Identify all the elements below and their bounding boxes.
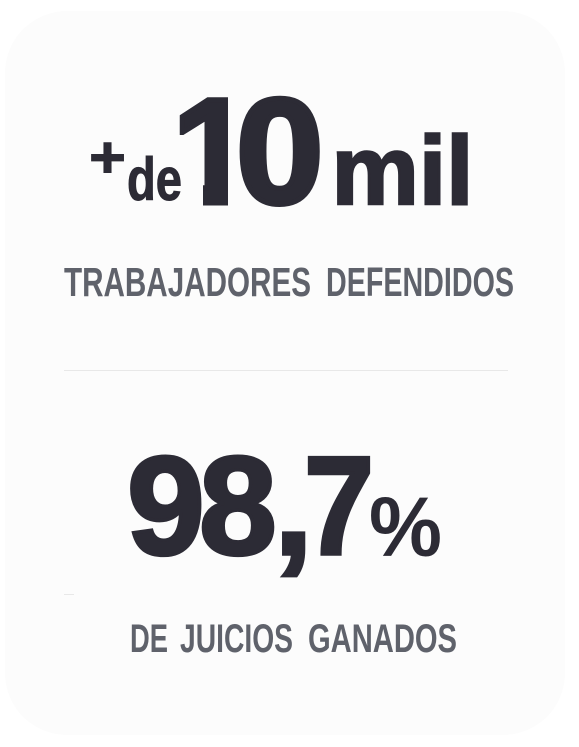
plus sign: + (89, 125, 126, 190)
label: trabajadores defendidos (64, 259, 514, 305)
word: de: de (127, 146, 182, 213)
digit: 0: 0 (236, 67, 324, 235)
number: 10 (180, 96, 320, 207)
label: de juicios ganados (130, 617, 457, 661)
stat: 98,7 percent (127, 427, 442, 584)
word: juicios: JUICIOS (180, 617, 293, 661)
digit: 7: 7 (304, 428, 374, 584)
word: mil: mil (332, 116, 474, 225)
stat: more than 10 thousand (91, 96, 468, 207)
word: ganados: GANADOS (308, 617, 457, 661)
word: trabajadores: TRABAJADORES (64, 259, 311, 305)
word: de: DE (130, 617, 168, 661)
number: 98,: 98, (127, 427, 313, 584)
percent sign: % (369, 480, 442, 574)
digit: 1: 1 (172, 67, 255, 235)
infographic (64, 96, 513, 652)
